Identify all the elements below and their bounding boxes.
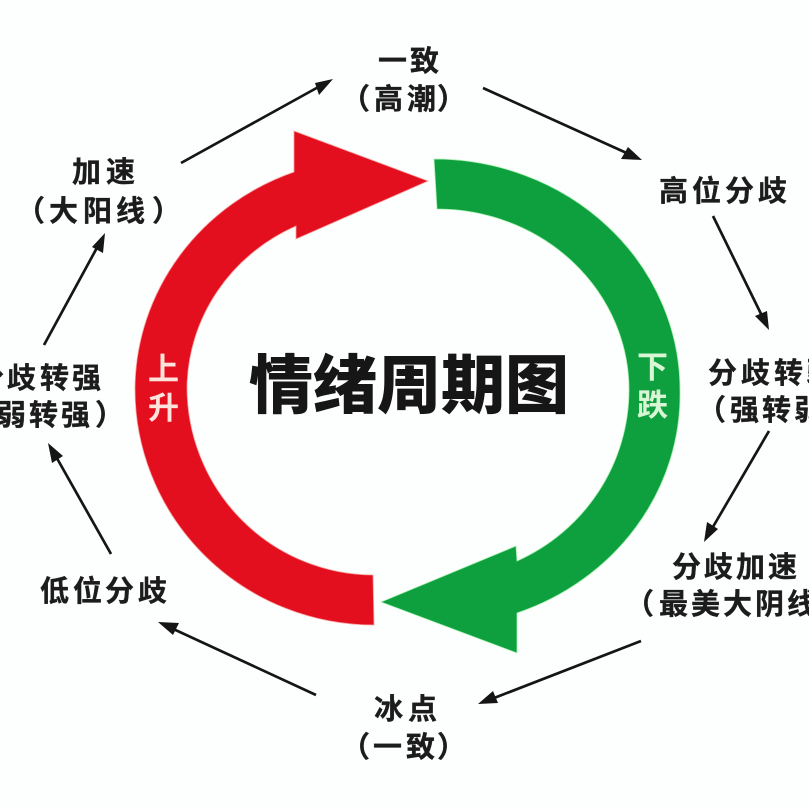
red rising arrow xyxy=(135,131,428,625)
label: freezing point xyxy=(341,693,466,764)
label: consensus (climax) xyxy=(341,45,466,116)
arrow: consensus to high divergence xyxy=(483,88,642,160)
label: acceleration: 加速 xyxy=(72,156,135,189)
label: rising xyxy=(148,352,179,426)
label: rising: 升 xyxy=(148,391,179,426)
label: acceleration xyxy=(16,156,181,228)
label: rising: 上 xyxy=(148,352,179,387)
label: falling: 跌 xyxy=(637,388,668,423)
label: divergence accelerates: 分歧加速 xyxy=(672,551,797,584)
green falling arrow xyxy=(381,159,680,653)
title: 情绪周期图 xyxy=(249,350,569,422)
arrow: acceleration to consensus xyxy=(181,79,333,163)
arrow: low divergence to divergence strong xyxy=(48,443,111,554)
label: divergence accelerates xyxy=(625,551,809,621)
label: consensus (climax): 一致 xyxy=(378,45,439,78)
label: consensus (climax): （高潮） xyxy=(341,83,466,116)
arrow: divergence weak to divergence accelerates xyxy=(704,431,769,542)
label: divergence to weak xyxy=(697,357,809,427)
label: falling: 下 xyxy=(637,350,668,385)
label: high divergence: 高位分歧 xyxy=(659,175,787,208)
label: low divergence: 低位分歧 xyxy=(40,575,167,608)
arrow: high divergence to divergence weak xyxy=(713,216,769,330)
label: acceleration: （大阳线） xyxy=(16,195,181,228)
arrow: freezing point to low divergence xyxy=(158,622,316,695)
label: freezing point: 冰点 xyxy=(374,693,437,726)
arrow: divergence strong to acceleration xyxy=(44,233,105,345)
label: divergence to strong xyxy=(0,362,124,432)
arrow: divergence accelerates to freezing point xyxy=(478,641,641,704)
label: freezing point: （一致） xyxy=(341,731,466,764)
label: falling xyxy=(637,350,668,423)
